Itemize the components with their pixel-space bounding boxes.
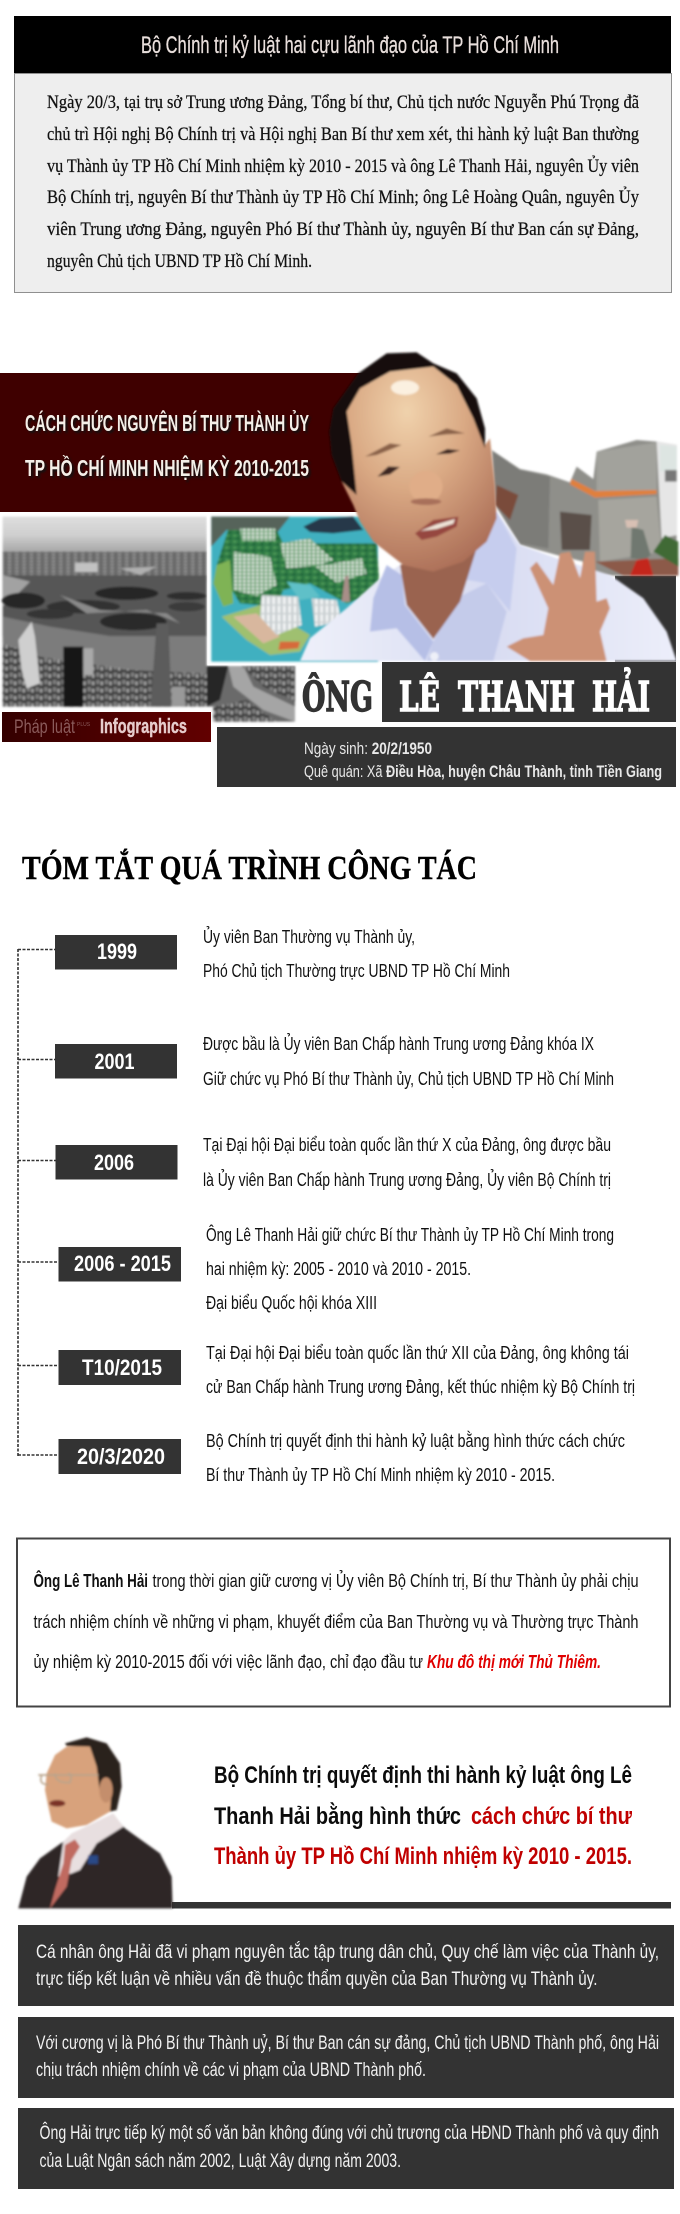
entry 1999	[55, 926, 510, 981]
panel: intro	[14, 16, 672, 292]
intro text block	[14, 74, 672, 292]
decision statement	[214, 1762, 633, 1870]
label: Ong: ÔNG	[302, 672, 373, 721]
face	[342, 367, 497, 572]
entry 2001	[55, 1033, 614, 1089]
panel: birth info: Ngày sinh: 20/2/1950	[304, 739, 432, 758]
callout: responsibility	[17, 1538, 670, 1706]
logo strip: Phap luat Plus Infographics: PLUS	[77, 722, 91, 728]
name plate	[302, 662, 676, 722]
eyes and brows	[377, 466, 400, 477]
callout: responsibility: Khu đô thị mới Thủ Thiêm.	[427, 1652, 601, 1672]
rule under decision	[172, 1902, 671, 1908]
dark backdrop block	[615, 576, 676, 662]
intro heading bar	[14, 16, 671, 73]
entry 20/3/2020: 20/3/2020	[77, 1444, 165, 1469]
logo strip: Phap luat Plus Infographics: Infographics	[100, 716, 187, 738]
photo: portrait of Le Thanh Hai	[300, 352, 677, 661]
decision statement: Thanh Hải bằng hình thức	[214, 1802, 461, 1830]
ear	[99, 1777, 113, 1803]
name box	[382, 662, 676, 722]
entry 2006: 2006	[94, 1150, 134, 1175]
hair	[65, 1737, 122, 1812]
lapel pin	[88, 1855, 98, 1864]
heading: career summary: TÓM TẮT QUÁ TRÌNH CÔNG TÁC	[22, 848, 477, 887]
panel: birth info	[217, 727, 676, 787]
entry 2006	[56, 1135, 611, 1190]
entry T10/2015: T10/2015	[82, 1355, 162, 1380]
collar	[370, 565, 433, 661]
hair	[329, 352, 485, 495]
decision statement: cách chức bí thư	[471, 1803, 633, 1830]
entry 2006 - 2015	[58, 1224, 614, 1313]
entry 2006 - 2015: hai nhiệm kỳ: 2005 - 2010 và 2010 - 2015.	[206, 1259, 471, 1279]
entry T10/2015	[58, 1343, 635, 1397]
glasses	[38, 1773, 98, 1784]
callout: responsibility: Ông Lê Thanh Hải	[34, 1570, 148, 1591]
panel: violation 2	[18, 2017, 674, 2098]
mouth	[415, 517, 458, 540]
neck	[400, 548, 477, 639]
panel: violation 1	[18, 1925, 674, 2006]
panel: hero banner title: TP HỒ CHÍ MINH NHIỆM KỲ 2010-2015	[25, 454, 309, 481]
logo strip: Phap luat Plus Infographics: Pháp luật	[14, 717, 76, 738]
entry 2001: 2001	[94, 1049, 134, 1074]
hand	[507, 552, 610, 661]
tie	[50, 1839, 80, 1908]
entry 20/3/2020	[58, 1430, 625, 1485]
name: THANH	[458, 673, 575, 721]
photo: small portrait	[18, 1737, 173, 1908]
timeline connector	[18, 949, 59, 1457]
entry 1999: Phó Chủ tịch Thường trực UBND TP Hồ Chí Minh	[203, 961, 510, 981]
entry 2006 - 2015: 2006 - 2015	[74, 1251, 171, 1276]
logo strip: Phap luat Plus Infographics	[2, 712, 211, 742]
entry 2006 - 2015: Đại biểu Quốc hội khóa XIII	[206, 1293, 377, 1313]
entry 20/3/2020: Bí thư Thành ủy TP Hồ Chí Minh nhiệm kỳ 2010 - 2015.	[206, 1465, 555, 1485]
panel: violation 2: chịu trách nhiệm chính về các vi phạm của UBND Thành phố.	[36, 2060, 426, 2081]
panel: hero banner title	[0, 373, 370, 512]
entry 1999: Ủy viên Ban Thường vụ Thành ủy,	[203, 926, 415, 947]
callout: responsibility: ủy nhiệm kỳ 2010-2015 đối với việc lãnh đạo, chỉ đạo đầu tư	[34, 1652, 423, 1672]
photo: demolished wall with passer-by	[492, 440, 678, 662]
name: HẢI	[592, 668, 650, 721]
mouth	[49, 1800, 65, 1807]
nose	[409, 471, 443, 503]
entry 1999: 1999	[97, 939, 137, 964]
panel: violation 3: của Luật Ngân sách năm 2002, Luật Xây dựng năm 2003.	[40, 2151, 401, 2172]
name	[399, 668, 650, 721]
photo: Thu Thiem urban area model	[207, 513, 387, 665]
shirt	[300, 512, 677, 661]
panel: violation 3	[18, 2108, 674, 2189]
timeline	[18, 926, 635, 1485]
name: LÊ	[399, 672, 440, 721]
panel: hero banner title: CÁCH CHỨC NGUYÊN BÍ THƯ THÀNH ỦY	[25, 408, 309, 436]
button	[430, 652, 439, 661]
photo: city black and white	[2, 517, 295, 722]
face	[45, 1745, 115, 1828]
intro text block: nguyên Chủ tịch UBND TP Hồ Chí Minh.	[47, 251, 312, 272]
shirt	[58, 1813, 123, 1877]
suit	[18, 1815, 173, 1908]
